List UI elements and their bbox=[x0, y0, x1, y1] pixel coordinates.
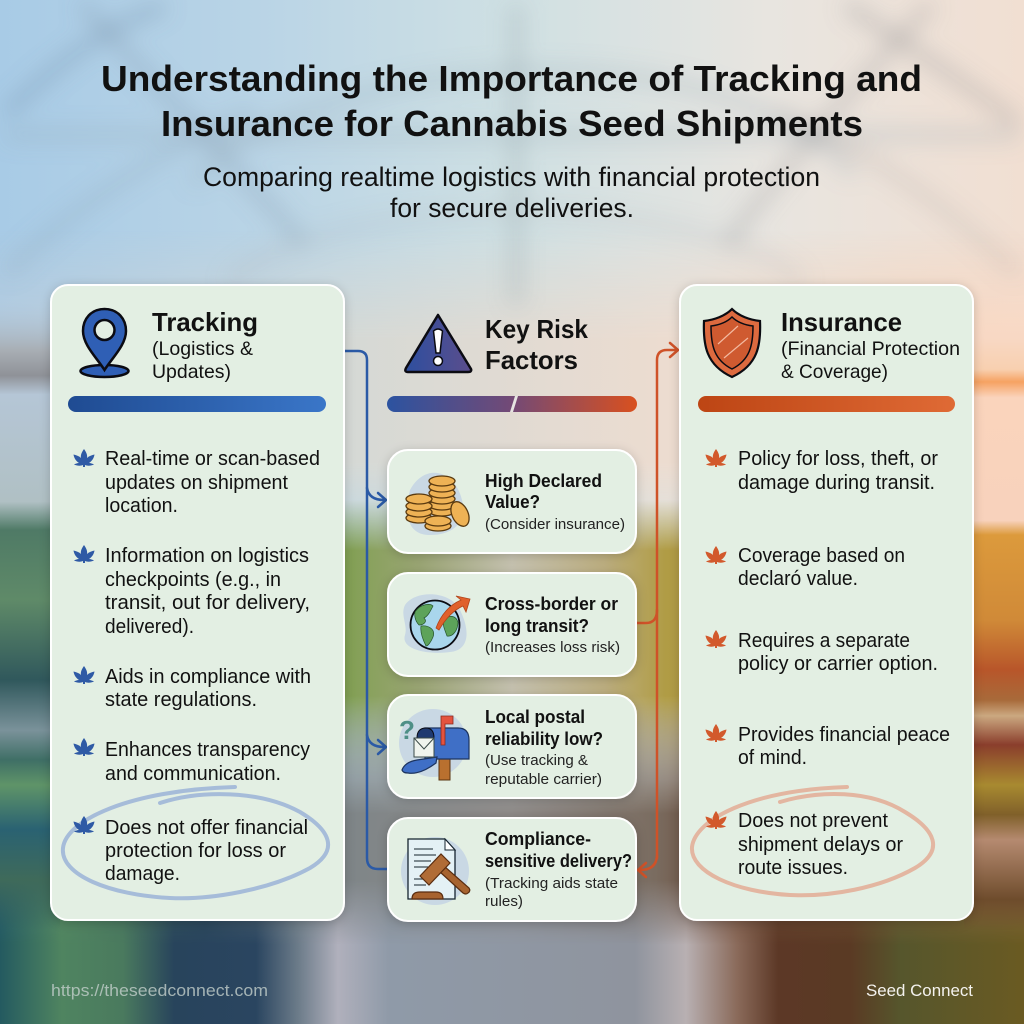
text: high declared value: (Consider insurance) bbox=[485, 516, 625, 533]
bullet: logistics checkpoints: checkpoints (e.g., in bbox=[105, 569, 281, 591]
heading: tracking: (Logistics & bbox=[152, 338, 253, 360]
bar: tracking colour bbox=[68, 396, 326, 412]
heading: key risk factors bbox=[485, 314, 589, 375]
text: compliance-sensitive: sensitive delivery? bbox=[485, 851, 632, 871]
heading: key risk factors: Factors bbox=[485, 345, 578, 375]
text: compliance-sensitive: Compliance- bbox=[485, 829, 591, 849]
bullet: coverage: declaró value. bbox=[738, 568, 858, 590]
bullet: peace of mind bbox=[706, 724, 950, 769]
card: local postal reliability bbox=[388, 695, 636, 798]
footer: url: https://theseedconnect.com bbox=[51, 982, 268, 1000]
card: cross-border bbox=[388, 573, 636, 676]
callout: circled limitation, tracking: damage. bbox=[105, 863, 180, 885]
bullet: real-time updates: location. bbox=[105, 495, 178, 517]
bar: mixed colour with slash bbox=[387, 396, 637, 412]
callout: circled limitation, tracking: Does not offer financial bbox=[105, 817, 308, 839]
bar: insurance colour bbox=[698, 396, 955, 412]
bullet: compliance bbox=[74, 666, 311, 711]
text: local postal reliability: (Use tracking & bbox=[485, 752, 588, 769]
icon: warning triangle bbox=[405, 315, 471, 372]
bullet: transparency: Enhances transparency bbox=[105, 739, 310, 761]
bullet: coverage: Coverage based on bbox=[738, 545, 905, 567]
bullet: policy bbox=[706, 448, 938, 494]
bullet: transparency bbox=[74, 738, 310, 785]
icon: globe with arrow bbox=[403, 594, 470, 653]
text: local postal reliability bbox=[485, 707, 603, 788]
bullet: peace of mind: Provides financial peace bbox=[738, 724, 950, 746]
heading: tracking bbox=[152, 307, 258, 383]
bullet: coverage bbox=[706, 545, 905, 590]
connector: insurance orange lines and arrows bbox=[637, 343, 678, 877]
bullet: policy: Policy for loss, theft, or bbox=[738, 448, 938, 470]
callout: circled limitation, insurance: shipment delays or bbox=[738, 834, 903, 856]
text: compliance-sensitive: (Tracking aids state bbox=[485, 875, 618, 892]
bullet: logistics checkpoints: transit, out for delivery, bbox=[105, 592, 310, 614]
bullet: separate policy: policy or carrier option. bbox=[738, 653, 938, 675]
text: cross-border: Cross-border or bbox=[485, 594, 618, 614]
bullet: logistics checkpoints bbox=[74, 545, 310, 638]
icon: mailbox with question mark: ? bbox=[399, 715, 415, 745]
footer: brand: Seed Connect bbox=[866, 982, 973, 1000]
icon: location pin bbox=[80, 309, 128, 377]
title bbox=[101, 58, 922, 144]
bullet: separate policy bbox=[706, 630, 938, 675]
bullet: logistics checkpoints: delivered). bbox=[105, 616, 194, 638]
heading: tracking: Tracking bbox=[152, 307, 258, 337]
text: local postal reliability: Local postal bbox=[485, 707, 585, 727]
text: cross-border: (Increases loss risk) bbox=[485, 639, 620, 656]
callout: circled limitation, insurance: Does not prevent bbox=[738, 810, 888, 832]
title: Insurance for Cannabis Seed Shipments bbox=[161, 103, 863, 144]
title: Understanding the Importance of Tracking and bbox=[101, 58, 922, 99]
subtitle bbox=[203, 162, 820, 223]
panel: insurance bbox=[680, 285, 973, 920]
text: high declared value bbox=[485, 471, 625, 533]
text: local postal reliability: reputable carrier) bbox=[485, 771, 602, 788]
text: compliance-sensitive bbox=[485, 829, 632, 910]
callout: circled limitation, insurance: route issues. bbox=[738, 857, 848, 879]
bullet: compliance: Aids in compliance with bbox=[105, 666, 311, 688]
icon: document and gavel bbox=[401, 837, 470, 905]
heading: tracking: Updates) bbox=[152, 361, 231, 383]
bullet: real-time updates bbox=[74, 448, 320, 517]
subtitle: for secure deliveries. bbox=[390, 193, 634, 223]
card: compliance-sensitive delivery bbox=[388, 818, 636, 921]
bullet: peace of mind: of mind. bbox=[738, 747, 807, 769]
icon: shield bbox=[704, 309, 760, 377]
bullet: real-time updates: updates on shipment bbox=[105, 472, 288, 494]
card: high declared value bbox=[388, 450, 636, 553]
bullet: logistics checkpoints: Information on logistics bbox=[105, 545, 309, 567]
callout: circled limitation, insurance bbox=[692, 787, 933, 895]
text: local postal reliability: reliability low? bbox=[485, 729, 603, 749]
callout: circled limitation, tracking: protection for loss or bbox=[105, 840, 286, 862]
connector: tracking blue lines and arrows bbox=[344, 351, 388, 869]
text: high declared value: High Declared bbox=[485, 471, 602, 491]
heading: key risk factors: Key Risk bbox=[485, 314, 589, 344]
heading: insurance: Insurance bbox=[781, 307, 902, 337]
icon: coins bbox=[406, 473, 473, 535]
panel: key risk factors header bbox=[387, 314, 637, 412]
heading: insurance bbox=[781, 307, 960, 383]
text: high declared value: Value? bbox=[485, 492, 540, 512]
text: compliance-sensitive: rules) bbox=[485, 893, 523, 910]
heading: insurance: & Coverage) bbox=[781, 361, 888, 383]
panel: tracking bbox=[51, 285, 344, 920]
bullet: transparency: and communication. bbox=[105, 763, 281, 785]
bullet: policy: damage during transit. bbox=[738, 472, 935, 494]
subtitle: Comparing realtime logistics with financial protection bbox=[203, 162, 820, 192]
bullet: real-time updates: Real-time or scan-based bbox=[105, 448, 320, 470]
text: cross-border: long transit? bbox=[485, 616, 589, 636]
bullet: separate policy: Requires a separate bbox=[738, 630, 910, 652]
callout: circled limitation, tracking bbox=[63, 787, 328, 898]
heading: insurance: (Financial Protection bbox=[781, 338, 960, 360]
bullet: compliance: state regulations. bbox=[105, 689, 257, 711]
text: cross-border bbox=[485, 594, 620, 656]
icon: mailbox with question mark bbox=[399, 709, 469, 780]
